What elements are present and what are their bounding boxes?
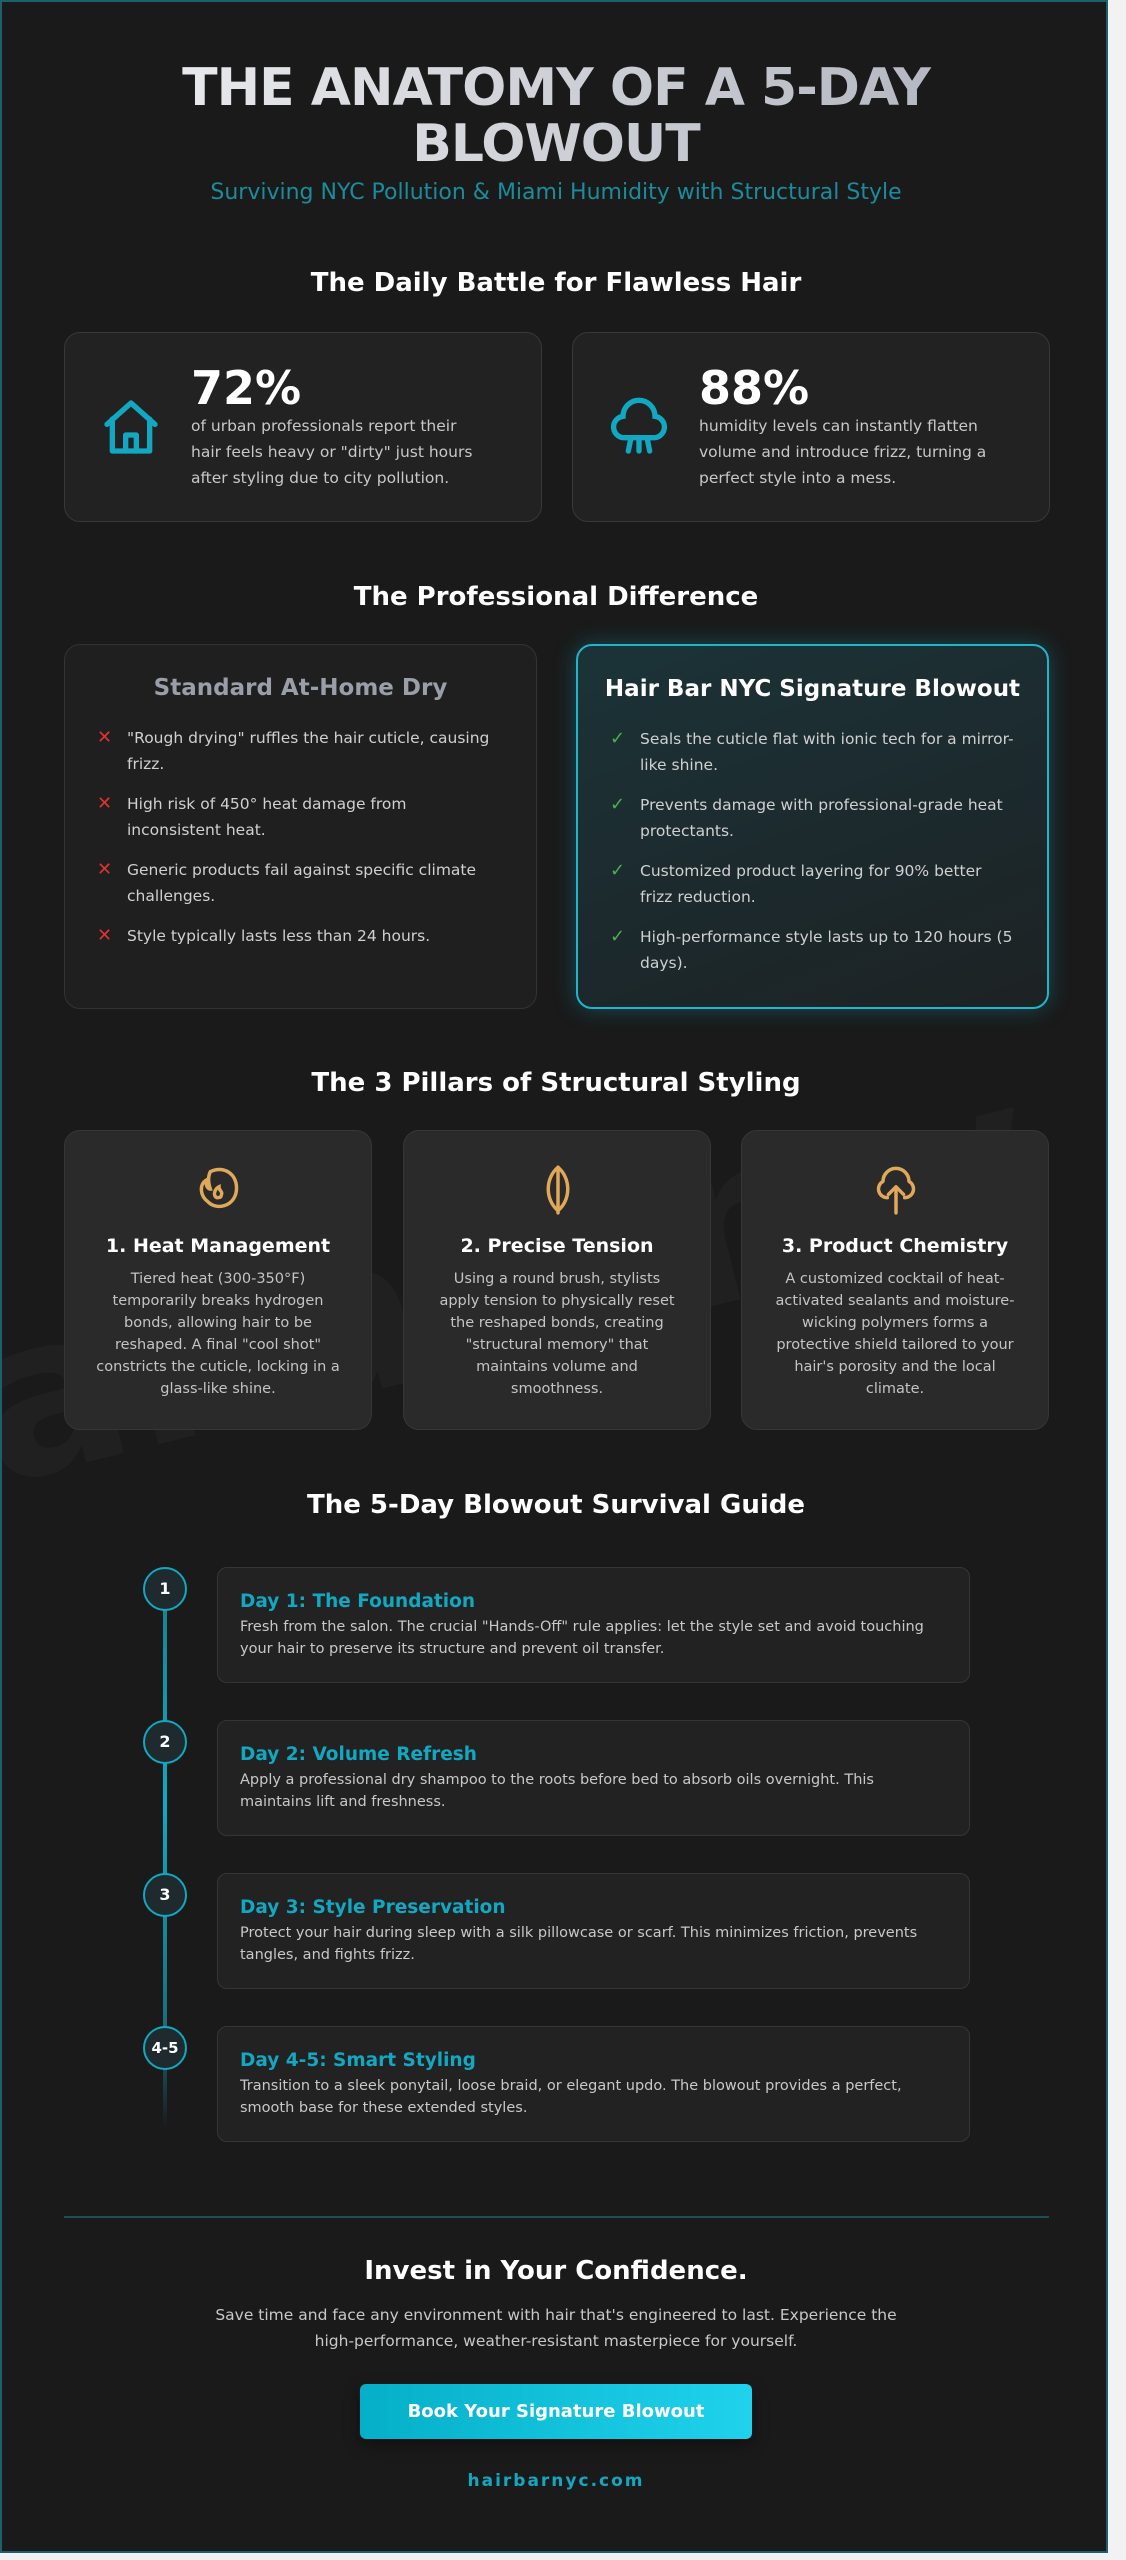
- timeline step: day 3: Day 3: Style Preservation: [240, 1897, 506, 1918]
- timeline: [163, 1610, 167, 2120]
- panel: standard at-home: High risk of 450° heat damage from inconsistent heat.: [127, 795, 407, 839]
- panel: signature blowout: Customized product layering for 90% better frizz reduction.: [640, 862, 982, 906]
- panel: standard at-home: ✕: [97, 793, 112, 814]
- timeline marker 1: [143, 1567, 187, 1611]
- timeline step: day 4-5: Transition to a sleek ponytail, loose braid, or elegant updo. The blowout provides a perfect, smooth base for these extended styles.: [240, 2078, 902, 2116]
- cta text: Save time and face any environment with hair that's engineered to last. Experience the high-performance, weather-resistant masterpiece for yourself.: [215, 2306, 897, 2350]
- icon: flame: [200, 1168, 238, 1208]
- timeline step: day 1: [217, 1567, 970, 1683]
- icon: rain cloud: [610, 398, 668, 454]
- stat card: pollution: [64, 332, 542, 522]
- panel: standard at-home: ✕: [97, 727, 112, 748]
- title: THE ANATOMY OF A 5-DAY: [182, 58, 930, 118]
- timeline step: day 1: Fresh from the salon. The crucial "Hands-Off" rule applies: let the style set and avoid touching your hair to preserve its structure and prevent oil transfer.: [240, 1619, 924, 1657]
- panel: standard at-home: Standard At-Home Dry: [154, 675, 447, 701]
- timeline marker 2: [143, 1720, 187, 1764]
- panel: signature blowout: [576, 644, 1049, 1009]
- website: hairbarnyc.com: [468, 2471, 644, 2491]
- icon: cloud upload: [876, 1166, 916, 1215]
- panel: signature blowout: Prevents damage with professional-grade heat protectants.: [640, 796, 1003, 840]
- heading: survival guide: The 5-Day Blowout Survival Guide: [307, 1490, 805, 1520]
- timeline marker 4-5: 4-5: [151, 2039, 179, 2057]
- heading: 3 pillars: The 3 Pillars of Structural Styling: [311, 1068, 801, 1098]
- pillar: tension: Using a round brush, stylists apply tension to physically reset the reshaped bonds, creating "structural memory" that maintains volume and smoothness.: [439, 1271, 675, 1397]
- panel: signature blowout: High-performance style lasts up to 120 hours (5 days).: [640, 928, 1012, 972]
- pillar: tension: 2. Precise Tension: [460, 1235, 654, 1257]
- panel: signature blowout: ✓: [610, 728, 625, 749]
- pillar: tension: [403, 1130, 711, 1430]
- stat card: humidity: [572, 332, 1050, 522]
- stat card: humidity: humidity levels can instantly flatten volume and introduce frizz, turning a perfect style into a mess.: [699, 417, 986, 487]
- timeline marker 1: 1: [159, 1579, 171, 1598]
- pillar: chemistry: [741, 1130, 1049, 1430]
- pillar: heat: [64, 1130, 372, 1430]
- timeline step: day 1: Day 1: The Foundation: [240, 1591, 475, 1612]
- panel: signature blowout: ✓: [610, 794, 625, 815]
- cta button: Book Your Signature Blowout: [408, 2401, 704, 2422]
- panel: signature blowout: Seals the cuticle flat with ionic tech for a mirror-like shine.: [640, 730, 1014, 774]
- panel: standard at-home: ✕: [97, 859, 112, 880]
- panel: standard at-home: ✕: [97, 925, 112, 946]
- timeline marker 4-5: [143, 2026, 187, 2070]
- pillar: heat: 1. Heat Management: [106, 1235, 330, 1257]
- icon: house: [104, 400, 158, 454]
- panel: standard at-home: Generic products fail against specific climate challenges.: [127, 861, 476, 905]
- timeline marker 2: 2: [159, 1732, 171, 1751]
- panel: signature blowout: ✓: [610, 926, 625, 947]
- timeline step: day 3: Protect your hair during sleep with a silk pillowcase or scarf. This minimizes friction, prevents tangles, and fights frizz.: [240, 1925, 917, 1963]
- timeline step: day 2: [217, 1720, 970, 1836]
- title: [2, 60, 1110, 172]
- timeline step: day 2: Apply a professional dry shampoo to the roots before bed to absorb oils overnight. This maintains lift and freshness.: [240, 1772, 874, 1810]
- stat card: pollution: of urban professionals report their hair feels heavy or "dirty" just hours after styling due to city pollution.: [191, 417, 472, 487]
- timeline step: day 4-5: [217, 2026, 970, 2142]
- timeline step: day 3: [217, 1873, 970, 1989]
- timeline step: day 2: Day 2: Volume Refresh: [240, 1744, 477, 1765]
- timeline step: day 4-5: Day 4-5: Smart Styling: [240, 2050, 476, 2071]
- timeline marker 3: [143, 1873, 187, 1917]
- panel: standard at-home: Style typically lasts less than 24 hours.: [127, 927, 430, 945]
- panel: signature blowout: Hair Bar NYC Signature Blowout: [605, 676, 1020, 702]
- heading: daily battle: The Daily Battle for Flawless Hair: [311, 268, 801, 298]
- stat card: pollution: 72%: [191, 361, 301, 415]
- icon: tension leaf: [546, 1165, 570, 1215]
- panel: standard at-home: [64, 644, 537, 1009]
- pillar: heat: Tiered heat (300-350°F) temporarily breaks hydrogen bonds, allowing hair to be reshaped. A final "cool shot" constricts the cuticle, locking in a glass-like shine.: [96, 1271, 340, 1397]
- pillar: chemistry: A customized cocktail of heat-activated sealants and moisture-wicking polymers forms a protective shield tailored to your hair's porosity and the local climate.: [776, 1271, 1014, 1397]
- timeline marker 3: 3: [159, 1885, 171, 1904]
- cta button: [360, 2384, 752, 2439]
- heading: professional difference: The Professional Difference: [354, 582, 758, 612]
- panel: signature blowout: ✓: [610, 860, 625, 881]
- subtitle: Surviving NYC Pollution & Miami Humidity with Structural Style: [210, 180, 902, 205]
- panel: standard at-home: "Rough drying" ruffles the hair cuticle, causing frizz.: [127, 729, 489, 773]
- pillar: chemistry: 3. Product Chemistry: [782, 1235, 1008, 1257]
- title: BLOWOUT: [412, 114, 700, 174]
- heading: invest: Invest in Your Confidence.: [364, 2256, 748, 2286]
- stat card: humidity: 88%: [699, 361, 809, 415]
